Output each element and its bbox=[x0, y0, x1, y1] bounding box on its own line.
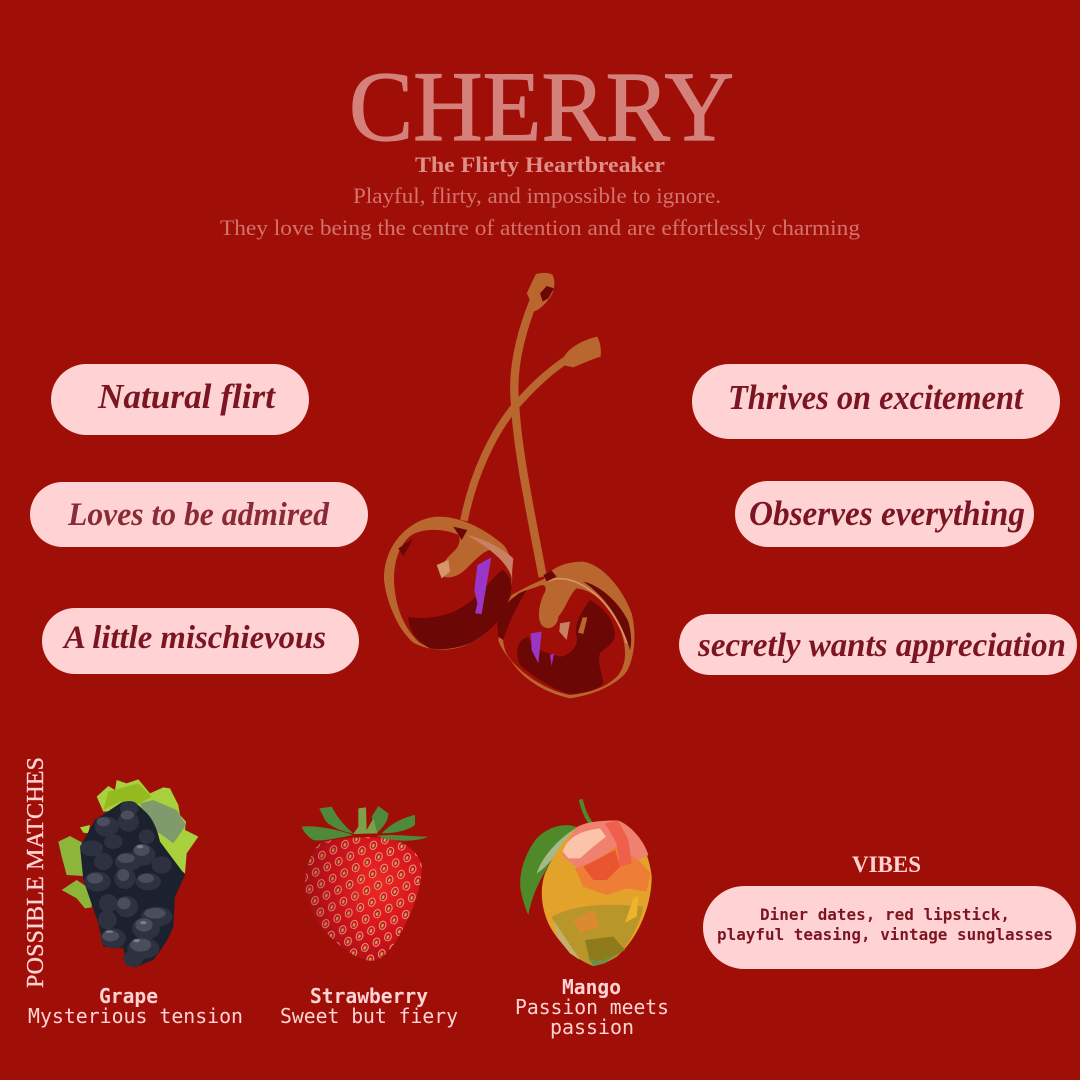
pill: Observes everything: Observes everything bbox=[749, 494, 1025, 533]
icon: strawberry bbox=[302, 806, 428, 961]
label: mango: passion bbox=[550, 1015, 634, 1039]
label: strawberry bbox=[280, 984, 458, 1028]
left cherry bbox=[384, 517, 513, 650]
pill: A little mischievous bbox=[42, 608, 359, 674]
strawberry body bbox=[305, 837, 422, 961]
label: mango: Mango bbox=[562, 975, 621, 999]
label: strawberry: Sweet but fiery bbox=[280, 1004, 458, 1028]
pill: Natural flirt: Natural flirt bbox=[97, 377, 276, 416]
icon: mango bbox=[520, 799, 652, 966]
pill: Observes everything bbox=[735, 481, 1034, 547]
mango leaf and stem bbox=[520, 799, 591, 915]
panel: vibes: playful teasing, vintage sunglasses bbox=[717, 925, 1053, 944]
pill: secretly wants appreciation bbox=[679, 614, 1077, 675]
label: grape: Grape bbox=[99, 984, 158, 1008]
pill: Thrives on excitement: Thrives on excitement bbox=[728, 378, 1024, 417]
label: grape bbox=[28, 984, 243, 1028]
pill: A little mischievous: A little mischievous bbox=[62, 620, 326, 656]
description text: Playful, flirty, and impossible to ignore. bbox=[353, 183, 721, 208]
right cherry bbox=[497, 562, 634, 698]
heading: vibes: VIBES bbox=[852, 852, 921, 877]
illustration: cherries bbox=[384, 273, 634, 698]
label: grape: Mysterious tension bbox=[28, 1004, 243, 1028]
pill: secretly wants appreciation: secretly wants appreciation bbox=[697, 627, 1066, 664]
heading: possible matches: POSSIBLE MATCHES bbox=[23, 757, 49, 988]
grape cluster bbox=[80, 801, 185, 967]
subtitle: The Flirty Heartbreaker: The Flirty Heartbreaker bbox=[415, 152, 665, 177]
mango fruit bbox=[542, 821, 652, 966]
pill: Natural flirt bbox=[51, 364, 309, 435]
pill: Loves to be admired bbox=[30, 482, 368, 547]
grape leaves bbox=[58, 779, 198, 908]
strawberry leaves bbox=[302, 806, 428, 841]
label: strawberry: Strawberry bbox=[310, 984, 428, 1008]
description text bbox=[220, 183, 860, 240]
icon: grape bbox=[58, 779, 198, 967]
panel: vibes: Diner dates, red lipstick, bbox=[760, 905, 1010, 924]
pill: Thrives on excitement bbox=[692, 364, 1060, 439]
stems bbox=[464, 273, 601, 577]
pill: Loves to be admired: Loves to be admired bbox=[67, 497, 329, 533]
label: mango bbox=[515, 975, 669, 1039]
label: mango: Passion meets bbox=[515, 995, 669, 1019]
title: CHERRY bbox=[349, 51, 734, 162]
description text: They love being the centre of attention and are effortlessly charming bbox=[220, 215, 860, 240]
panel: vibes bbox=[703, 886, 1076, 969]
